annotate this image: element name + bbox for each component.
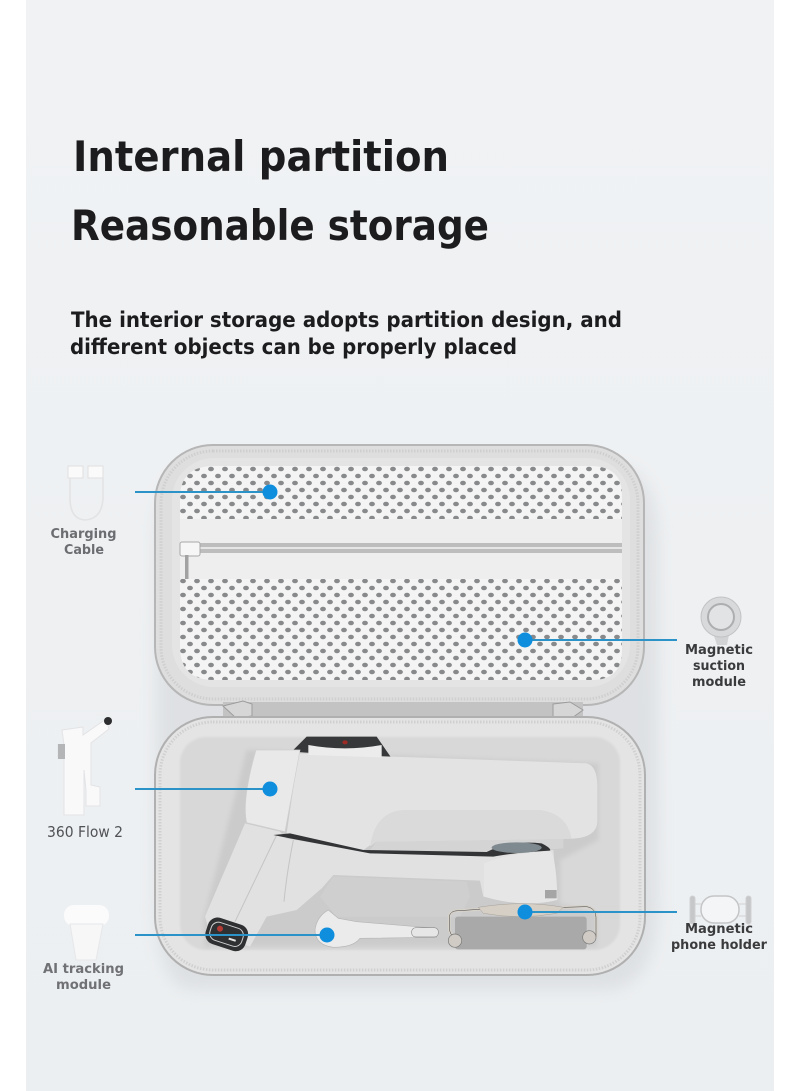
motor head (484, 852, 557, 903)
icon: suction module (701, 597, 741, 645)
pivot cap (245, 750, 300, 832)
icon: charging cable (68, 466, 103, 520)
icon: AI module (64, 905, 109, 960)
upper lid (155, 445, 644, 705)
bottom mesh pocket (180, 579, 622, 680)
arm crease (235, 835, 293, 922)
callout: magnetic suction module (518, 597, 753, 690)
recess shadow (203, 750, 598, 947)
label: module (692, 675, 746, 690)
pad below arm (320, 877, 470, 917)
folding arm (205, 823, 557, 947)
phone holder recess (455, 917, 587, 949)
title: Internal partition (73, 132, 449, 181)
connector line (135, 934, 327, 936)
subtitle text: The interior storage adopts partition design, and (71, 308, 622, 332)
label: Cable (64, 543, 104, 558)
dark seam (273, 833, 550, 857)
subtitle text (70, 308, 622, 359)
label (50, 527, 116, 558)
gap under handle (370, 839, 563, 853)
phone clamp (449, 907, 596, 943)
label: AI tracking (43, 962, 124, 977)
connector line (525, 639, 677, 641)
callout: magnetic phone holder (518, 896, 768, 953)
top mesh pocket (180, 466, 622, 519)
case shadow (156, 468, 658, 990)
icon: gimbal (58, 717, 112, 815)
zipper flap (180, 519, 622, 579)
gimbal inside tray (203, 737, 598, 954)
label: 360 Flow 2 (47, 823, 123, 841)
hinge (223, 701, 583, 718)
connector line (525, 911, 677, 913)
zipper (180, 542, 622, 592)
label (671, 922, 768, 953)
label (685, 643, 753, 690)
marker dot (262, 782, 278, 796)
foot with buttons (203, 915, 251, 954)
title: Reasonable storage (71, 201, 489, 250)
callout: 360 Flow 2 (47, 717, 278, 841)
label: Magnetic (685, 643, 753, 658)
top button (308, 745, 382, 757)
label: phone holder (671, 938, 768, 953)
upper handle (287, 753, 597, 850)
label: module (56, 978, 111, 993)
subtitle text: different objects can be properly placed (70, 335, 517, 359)
lower tray (155, 717, 645, 975)
connector line (135, 788, 270, 790)
callout: AI tracking module (43, 905, 334, 993)
handle grip (370, 810, 572, 847)
title (71, 132, 489, 250)
round screen (492, 842, 542, 853)
marker dot (320, 928, 334, 942)
top dark ring (292, 737, 392, 758)
callout: charging cable (50, 466, 278, 558)
open storage case (155, 445, 658, 990)
label: suction (693, 659, 745, 674)
marker dot (262, 484, 278, 500)
icon: phone holder (690, 896, 751, 924)
label: Charging (50, 527, 116, 542)
marker dot (518, 632, 532, 648)
label (43, 962, 124, 993)
label: Magnetic (685, 922, 753, 937)
connector line (135, 491, 270, 493)
AI module (315, 910, 437, 947)
marker dot (518, 904, 532, 920)
